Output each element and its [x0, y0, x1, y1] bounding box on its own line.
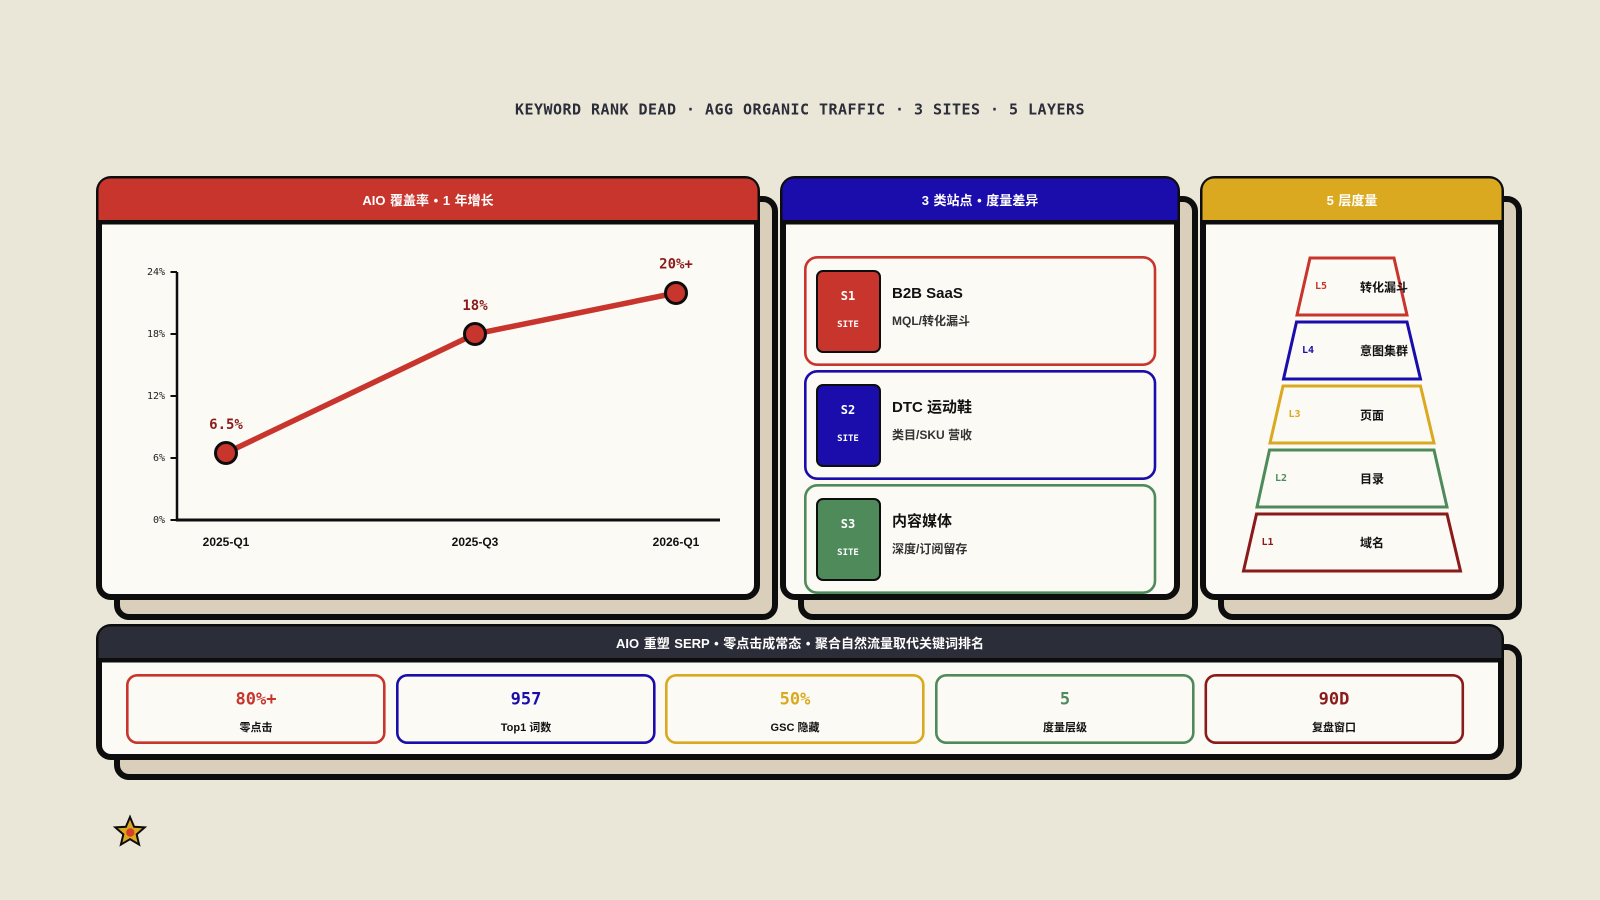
layer L4: L4	[1302, 345, 1314, 356]
layer L4	[1284, 322, 1420, 379]
y axis labels: 24%	[147, 267, 165, 278]
stat: review window: 90D	[1319, 690, 1349, 710]
layer L3	[1270, 386, 1434, 443]
site card: S2 DTC: 类目/SKU 营收	[892, 427, 972, 442]
line chart	[147, 256, 720, 549]
stat: GSC hidden: GSC 隐藏	[771, 720, 819, 734]
stat: GSC hidden	[666, 675, 923, 743]
panel header: site types: 3 类站点 • 度量差异	[922, 193, 1038, 208]
panel header: layers	[1202, 178, 1502, 224]
layer L1: 域名	[1360, 535, 1384, 550]
data points	[216, 282, 686, 464]
layer L2	[1257, 450, 1447, 507]
panel header: AIO coverage	[98, 178, 758, 224]
stat: zero click	[127, 675, 384, 743]
layer L5: 转化漏斗	[1360, 280, 1408, 294]
chart axes	[170, 272, 720, 522]
y axis labels	[147, 267, 165, 526]
layer L1	[1244, 514, 1460, 571]
panel header: AIO coverage: AIO 覆盖率 • 1 年增长	[362, 193, 494, 208]
x axis labels: 2026-Q1	[653, 535, 700, 549]
stat: top1 keywords	[397, 675, 654, 743]
site card: S1 B2B SaaS: SITE	[837, 320, 859, 330]
y axis labels: 6%	[153, 453, 165, 464]
stat: review window: 复盘窗口	[1312, 720, 1356, 734]
y axis labels: 18%	[147, 329, 165, 340]
layer L3: L3	[1288, 409, 1301, 420]
site card: S3 media	[805, 485, 1155, 593]
site card: S3 media: 内容媒体	[892, 512, 952, 530]
site card: S1 B2B SaaS: MQL/转化漏斗	[892, 313, 970, 328]
x axis labels: 2025-Q3	[452, 535, 499, 549]
site card: S2 DTC: DTC 运动鞋	[892, 399, 972, 416]
x axis labels: 2025-Q1	[203, 535, 250, 549]
panel header: SERP	[98, 626, 1502, 662]
panel: AIO coverage line chart	[98, 178, 775, 617]
site card: S1 B2B SaaS: B2B SaaS	[892, 285, 963, 302]
layer L3: 页面	[1360, 408, 1384, 422]
site card: S3 media: S3	[841, 517, 855, 531]
data labels: 6.5%	[209, 417, 243, 433]
icon: star	[115, 817, 145, 845]
stat: GSC hidden: 50%	[780, 690, 811, 710]
site card: S2 DTC: SITE	[837, 434, 859, 444]
y axis labels: 12%	[147, 391, 165, 402]
layer L2: L2	[1275, 473, 1287, 484]
subtitle: KEYWORD RANK DEAD · AGG ORGANIC TRAFFIC · 3 SITES · 5 LAYERS	[515, 100, 1085, 118]
stat: zero click: 80%+	[236, 690, 276, 710]
site card: S1 B2B SaaS: S1	[841, 289, 855, 303]
panel: 3 site types	[782, 178, 1195, 617]
stat: measurement layers: 度量层级	[1043, 720, 1087, 734]
panel: SERP summary stats	[98, 626, 1519, 777]
layer L1: L1	[1261, 537, 1274, 548]
stat: top1 keywords: 957	[511, 690, 541, 710]
layer L4: 意图集群	[1360, 343, 1408, 358]
site card: S3 media: 深度/订阅留存	[892, 541, 967, 556]
panel header: site types	[782, 178, 1178, 224]
site card: S2 DTC: S2	[841, 403, 855, 417]
panel header: layers: 5 层度量	[1327, 193, 1377, 208]
data labels: 18%	[462, 298, 488, 314]
site card: S2 DTC	[805, 371, 1155, 479]
stat: top1 keywords: Top1 词数	[501, 720, 551, 734]
layer L5: L5	[1315, 281, 1327, 292]
stat: measurement layers	[936, 675, 1193, 743]
data line	[226, 293, 676, 453]
layer L5	[1297, 258, 1408, 315]
site card: S3 media: SITE	[837, 548, 859, 558]
stat: zero click: 零点击	[240, 720, 272, 734]
panel header: SERP: AIO 重塑 SERP • 零点击成常态 • 聚合自然流量取代关键词排名	[616, 636, 984, 651]
stat: review window	[1206, 675, 1463, 743]
data labels: 20%+	[659, 256, 693, 272]
data labels	[209, 256, 693, 433]
y axis labels: 0%	[153, 515, 165, 526]
layer L2: 目录	[1360, 472, 1384, 486]
site card: S1 B2B SaaS	[805, 257, 1155, 365]
stat: measurement layers: 5	[1060, 690, 1070, 710]
x axis labels	[203, 535, 700, 549]
panel: 5 layer pyramid	[1202, 178, 1519, 617]
